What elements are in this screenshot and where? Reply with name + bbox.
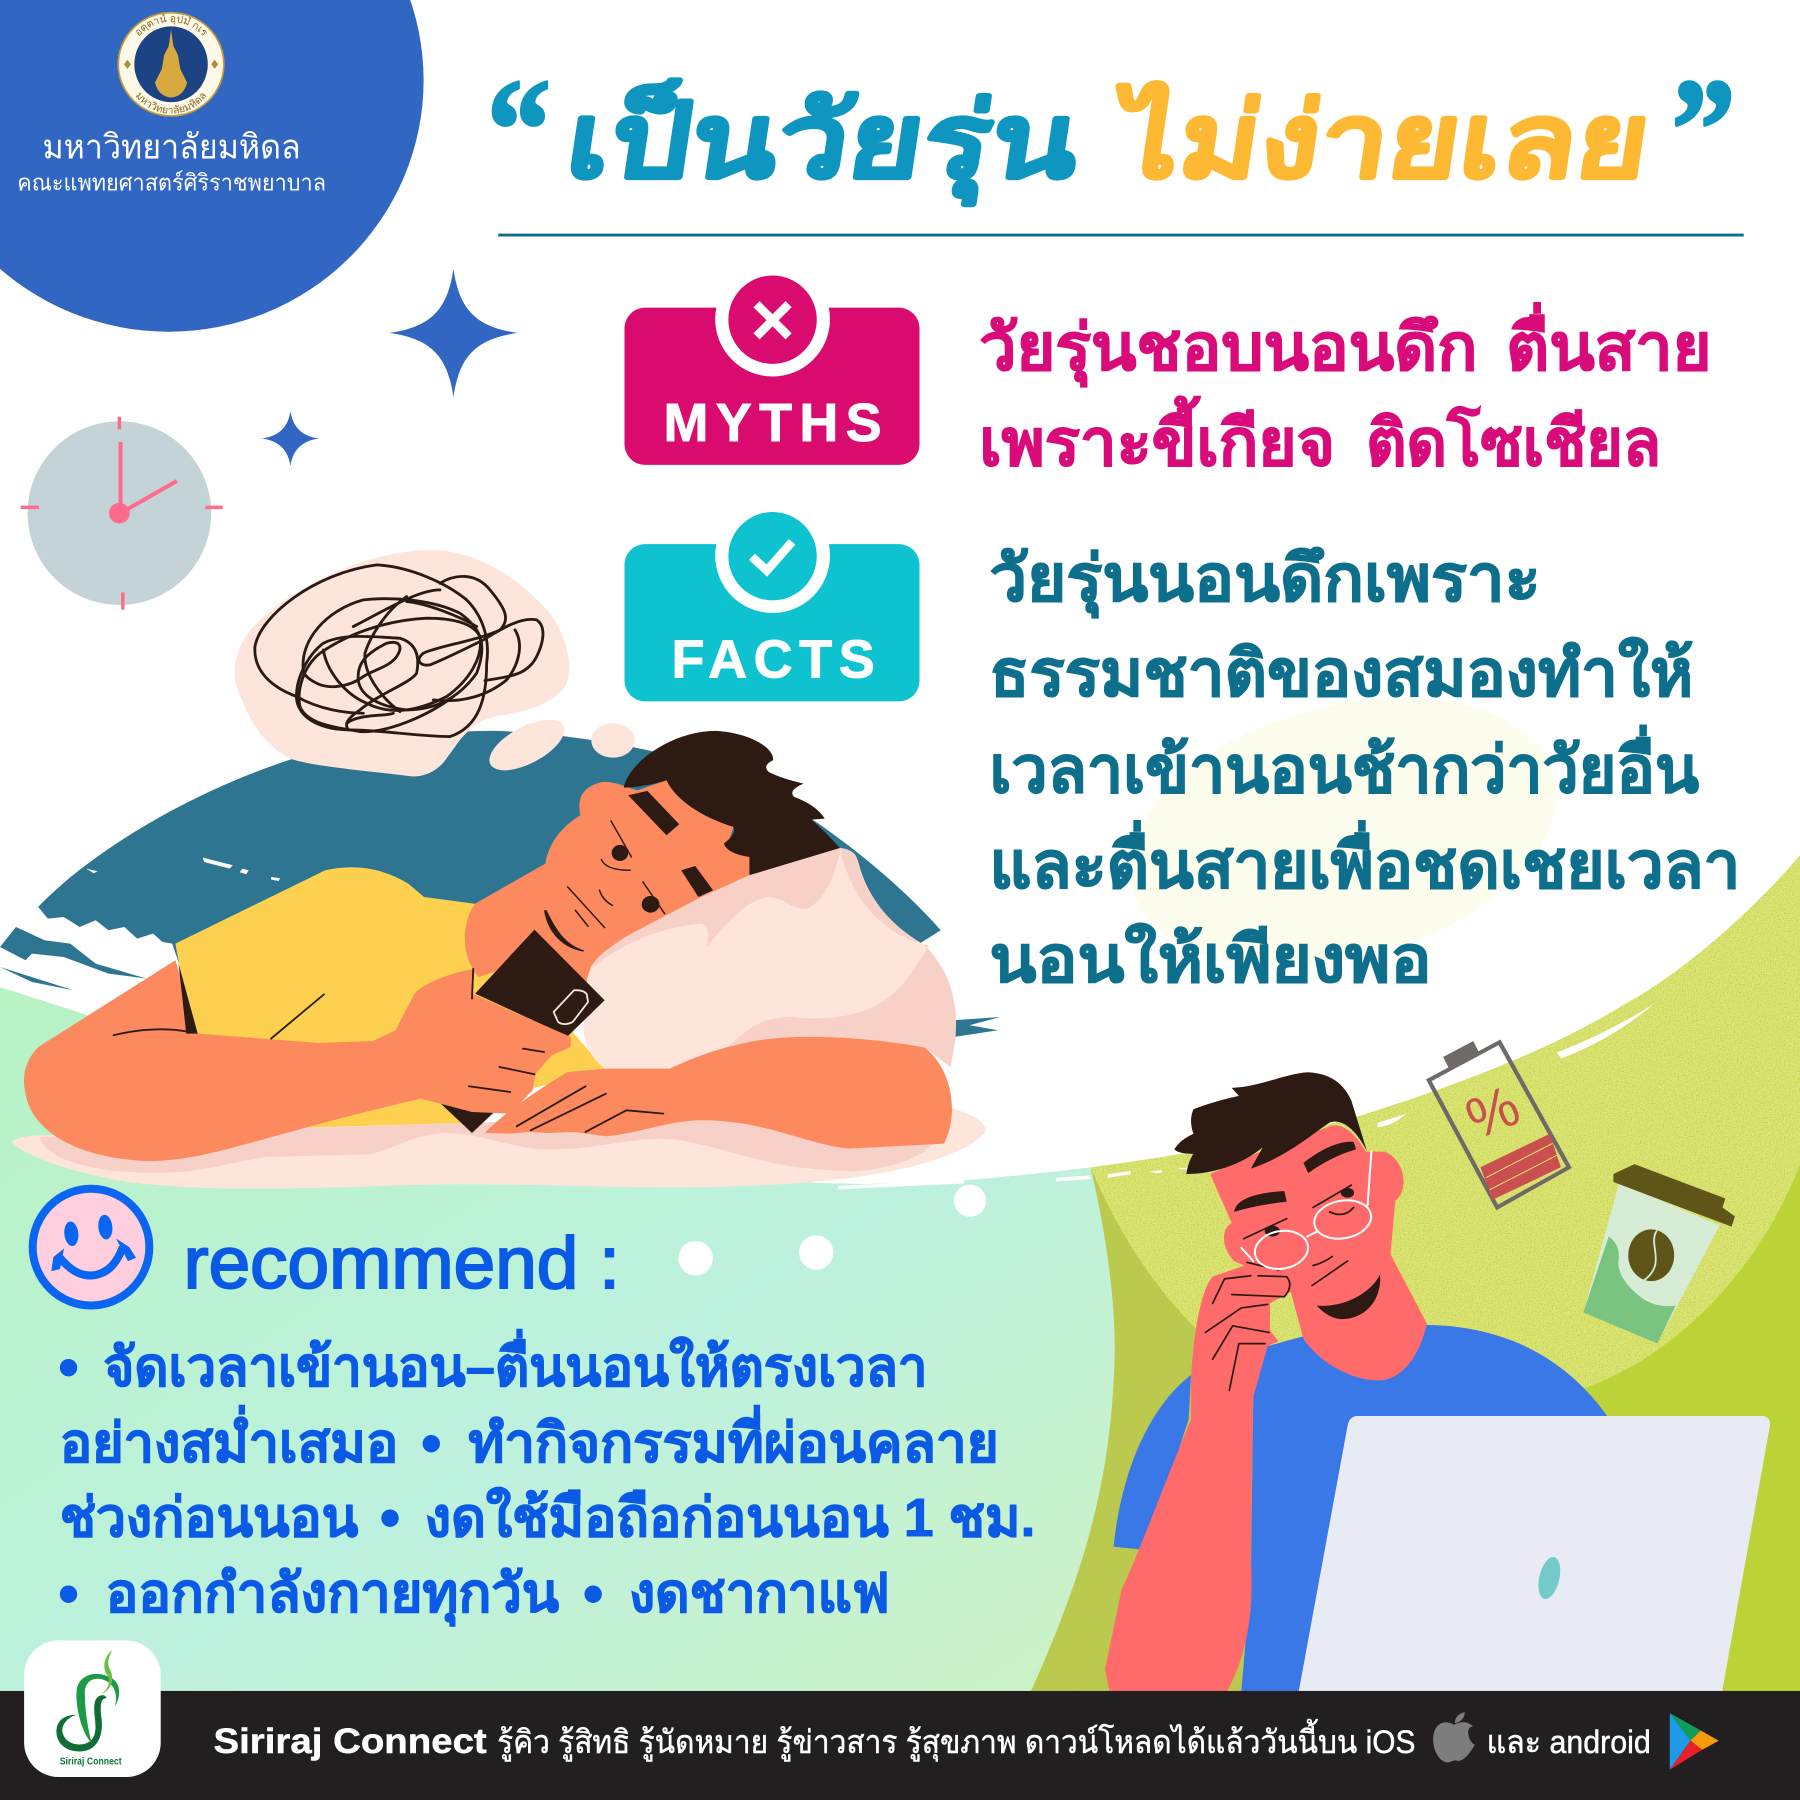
text: facts statement: เวลาเข้านอนช้ากว่าวัยอื่น [990, 724, 1699, 806]
icon: apple logo [1433, 1712, 1475, 1762]
text: recommendations list: • [380, 1486, 400, 1550]
panel: myths badge [624, 262, 920, 465]
text: facts statement: ธรรมชาติของสมองทำให้ [990, 636, 1693, 710]
illustration: sleeping teen with phone [11, 731, 986, 1189]
panel: facts badge [624, 498, 920, 701]
bed sheet [11, 1109, 986, 1189]
text: recommendations list: ช่วงก่อนนอน [60, 1488, 358, 1548]
decorative white dots [678, 1185, 986, 1275]
icon: university seal [117, 12, 225, 117]
icon: smiley face [33, 1189, 149, 1305]
text: facts statement: วัยรุ่นนอนดึกเพราะ [990, 542, 1541, 619]
icon: coffee cup [1583, 1164, 1735, 1344]
face [465, 780, 765, 1000]
head and neck [1210, 1125, 1427, 1380]
text: facts statement: นอนให้เพียงพอ [990, 922, 1432, 996]
icon: Siriraj Connect app logo: Siriraj Connect [60, 1756, 122, 1767]
text: myth statement: ติดโซเชียล [1366, 405, 1661, 479]
illustration: teal brush circle [0, 731, 1000, 1037]
text: recommendations list: • [59, 1562, 79, 1626]
icon: low battery [1429, 1041, 1569, 1207]
heading: recommend: recommend : [184, 1221, 620, 1304]
text: myth statement: เพราะขี้เกียจ [979, 395, 1335, 479]
title: “ [487, 50, 551, 210]
icon: large sparkle [389, 269, 518, 397]
text: facts statement: และตื่นสายเพื่อชดเชยเวลา [990, 819, 1740, 901]
icon: clock [21, 417, 223, 610]
icon: Siriraj Connect app logo [24, 1640, 161, 1777]
footer bar [0, 1691, 1800, 1800]
text: recommendations list: ออกกำลังกายทุกวัน [106, 1564, 559, 1627]
text: recommendations list: • [421, 1412, 441, 1476]
text: recommendations list: งดชากาแฟ [629, 1564, 890, 1624]
right arm [485, 1037, 952, 1149]
text: recommendations list: จัดเวลาเข้านอน–ตื่นนอนให้ตรงเวลา [103, 1329, 928, 1398]
panel: green background area [0, 855, 1800, 1699]
text: footer message: Siriraj Connect [214, 1721, 487, 1761]
shirt [1114, 1325, 1610, 1692]
yellow shirt [175, 867, 606, 1133]
title [487, 50, 1736, 210]
hair [1174, 1072, 1367, 1174]
text: myth statement: วัยรุ่นชอบนอนดึก [979, 312, 1477, 389]
icon: small sparkle [262, 411, 319, 466]
phone camera [554, 990, 588, 1024]
text: facts statement [990, 542, 1740, 996]
heading: university name: มหาวิทยาลัยมหิดล [42, 128, 301, 166]
title underline [498, 234, 1744, 236]
panel: facts badge: FACTS [672, 629, 875, 689]
panel: myths badge: MYTHS [664, 393, 882, 453]
battery percent symbol: % [1457, 1074, 1529, 1152]
brows, eyes and mouth [1234, 1142, 1380, 1319]
text: recommendations list: • [59, 1336, 79, 1400]
text: recommendations list: งดใช้มือถือก่อนนอน 1 ชม. [425, 1486, 1035, 1548]
title: ไม่ง่ายเลย [1099, 81, 1658, 200]
left arm [24, 960, 571, 1161]
title: เป็นวัยรุ่น [558, 78, 1088, 207]
text: myth statement: ตื่นสาย [1506, 302, 1712, 384]
glasses [1241, 1152, 1375, 1273]
text: recommendations list [59, 1329, 1035, 1627]
icon: university seal: อตฺตานํ อุปมํ กเร [136, 14, 207, 36]
icon: tangled scribble [255, 565, 543, 737]
panel: university header circle [0, 0, 424, 332]
illustration: tired man at laptop [1105, 1041, 1770, 1692]
pillow [584, 848, 956, 1069]
arm and hand [1105, 1263, 1294, 1692]
text: faculty name: คณะแพทยศาสตร์ศิริราชพยาบาล [17, 170, 326, 196]
text: recommendations list: • [583, 1562, 603, 1626]
facial features [628, 791, 713, 897]
text: myth statement [979, 302, 1712, 479]
text: footer message: รู้คิว รู้สิทธิ รู้นัดหมาย รู้ข่าวสาร รู้สุขภาพ ดาวน์โหลดได้แล้ววันนี้บน iOS [497, 1718, 1415, 1762]
pale yellow blob behind facts [1100, 654, 1586, 1011]
title: ” [1671, 50, 1736, 210]
icon: university seal: มหาวิทยาลัยมหิดล [136, 92, 206, 114]
laptop [1299, 1416, 1770, 1692]
phone [440, 930, 605, 1133]
text: recommendations list: ทำกิจกรรมที่ผ่อนคลาย [468, 1404, 999, 1473]
text: recommendations list: อย่างสม่ำเสมอ [60, 1404, 398, 1473]
icon: play store logo [1670, 1713, 1719, 1770]
hair [624, 731, 842, 877]
text: footer message: และ android [1487, 1724, 1651, 1760]
illustration: thought bubble [235, 550, 635, 781]
text: footer message [214, 1718, 1651, 1762]
